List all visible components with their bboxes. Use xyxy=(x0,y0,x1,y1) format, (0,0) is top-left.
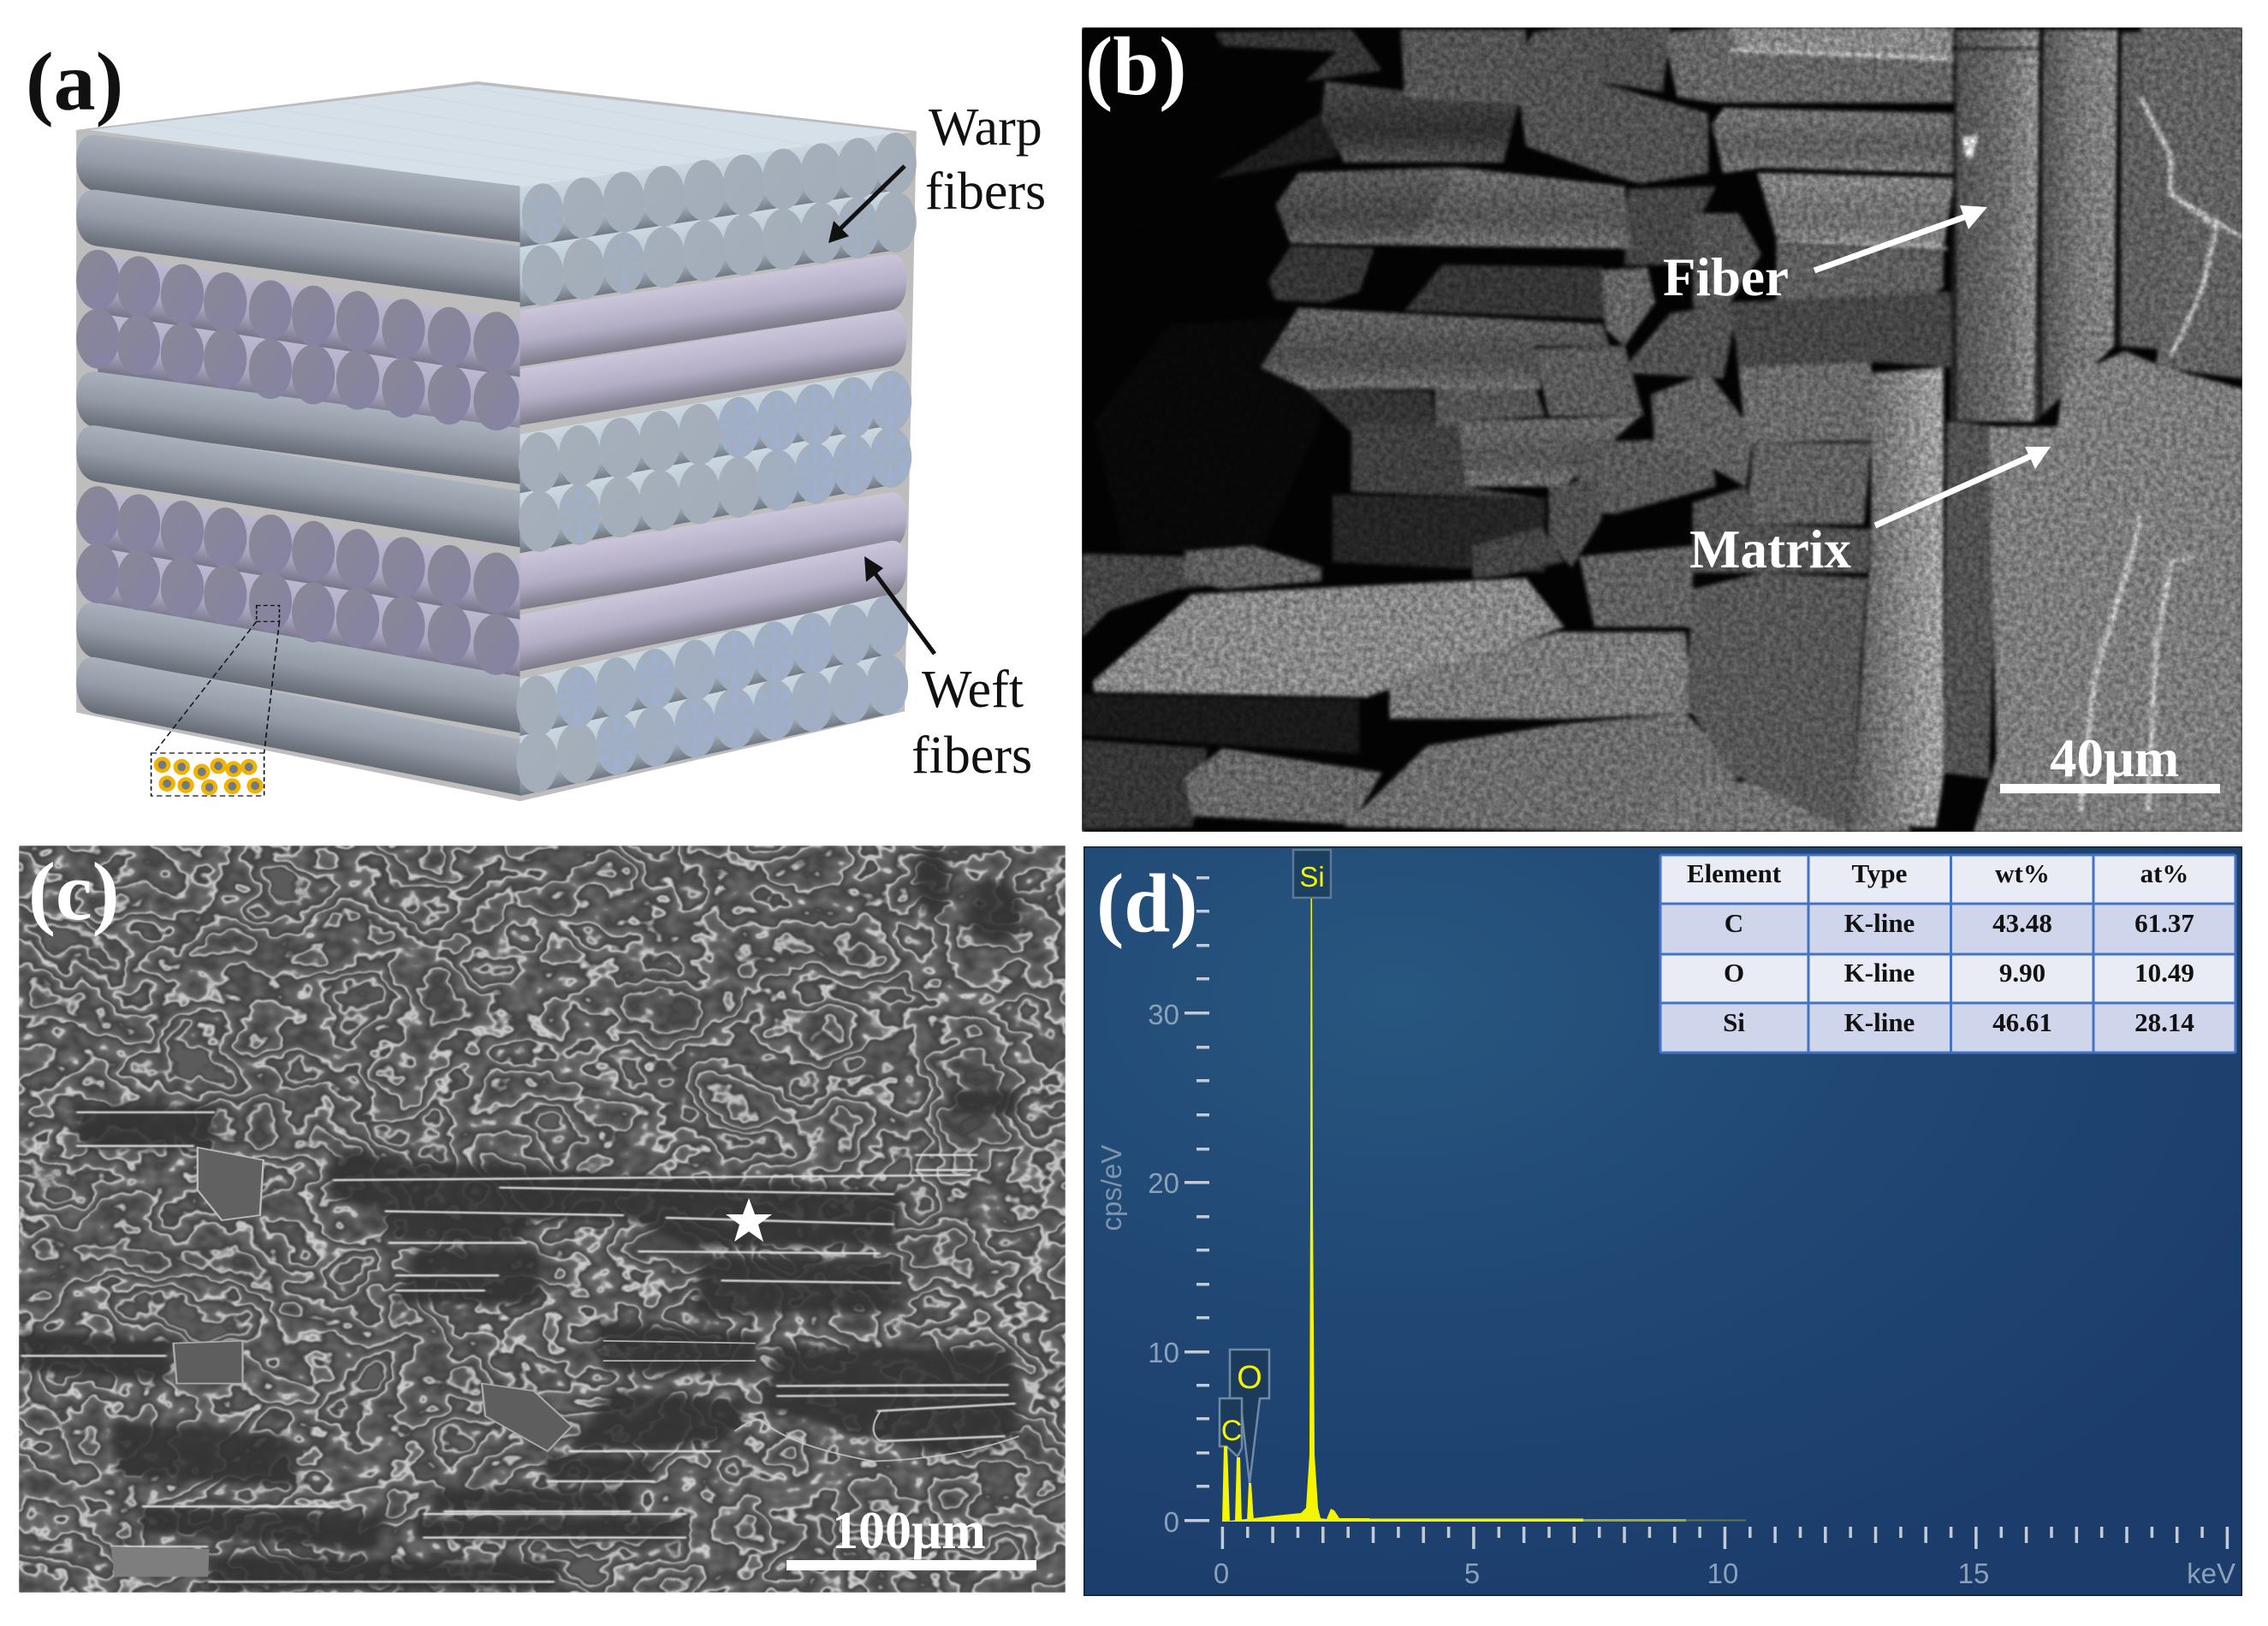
x axis ticks xyxy=(1222,1527,2227,1549)
fiber block 3D model xyxy=(76,81,917,801)
x axis values: 15 xyxy=(1958,1558,1989,1589)
label (b): (b) xyxy=(1085,21,1187,112)
row: O: O xyxy=(1724,958,1744,988)
icon: star marker xyxy=(726,1198,772,1242)
label: fiber: Fiber xyxy=(1663,247,1789,307)
table header: Element xyxy=(1687,858,1782,888)
y axis title: cps/eV xyxy=(1095,1145,1127,1231)
label: warp fibers: fibers xyxy=(925,163,1046,221)
y axis values: 10 xyxy=(1148,1337,1179,1368)
row: C: 43.48 xyxy=(1992,908,2052,938)
arrow: weft fibers xyxy=(864,556,935,654)
row: C: 61.37 xyxy=(2134,908,2194,938)
element marker: Si: Si xyxy=(1299,861,1325,893)
arrow: warp fibers xyxy=(828,166,905,243)
spectrum trace with C, O and Si peaks xyxy=(1222,899,1746,1522)
row: C: C xyxy=(1725,908,1743,938)
x axis values: keV xyxy=(2187,1558,2235,1589)
scale bar: 40 micrometres xyxy=(2000,739,2220,793)
table header: wt% xyxy=(1995,858,2050,888)
label: weft fibers: Weft xyxy=(922,661,1024,719)
grooves left by pulled-out fibers xyxy=(21,846,1023,1589)
row: Si: 28.14 xyxy=(2134,1007,2194,1037)
scale bar: 100 micrometres: 100μm xyxy=(832,1502,986,1560)
SEM micrograph: rough fracture texture xyxy=(19,846,1066,1593)
arrow: matrix xyxy=(1875,447,2051,525)
y axis ticks xyxy=(1184,876,1209,1522)
x axis values xyxy=(1214,1558,2235,1589)
scale bar: 40 micrometres: 40μm xyxy=(2050,728,2179,788)
element marker: C xyxy=(1220,1398,1242,1457)
label (d): (d) xyxy=(1096,858,1198,949)
scale bar: 100 micrometres xyxy=(787,1512,1036,1570)
row: C: K-line xyxy=(1844,908,1915,938)
label (a): (a) xyxy=(26,36,123,128)
panel (a): woven fiber block schematic xyxy=(26,36,1046,801)
panel (b): SEM image of fiber pull-out xyxy=(1082,21,2243,832)
panel (d): EDS spectrum xyxy=(1084,846,2242,1596)
y axis values: 0 xyxy=(1164,1506,1179,1538)
table header: at% xyxy=(2140,858,2188,888)
element marker: O: O xyxy=(1237,1360,1262,1396)
element marker: C: C xyxy=(1221,1415,1242,1447)
x axis values: 5 xyxy=(1464,1558,1480,1589)
row: Si: 46.61 xyxy=(1992,1007,2052,1037)
label: matrix: Matrix xyxy=(1689,519,1851,579)
inset: zoom box and fiber cross-section detail xyxy=(151,606,279,796)
arrow: fiber xyxy=(1814,205,1987,270)
table: element composition xyxy=(1660,855,2235,1053)
x axis values: 10 xyxy=(1707,1558,1738,1589)
row: C xyxy=(1725,908,2194,938)
panel (c): SEM image of fracture surface xyxy=(19,846,1066,1593)
row: O: 10.49 xyxy=(2134,958,2194,988)
row: Si: K-line xyxy=(1844,1007,1915,1037)
label: weft fibers: fibers xyxy=(911,727,1032,785)
label: warp fibers: Warp xyxy=(929,98,1042,157)
spectrum background xyxy=(1084,846,2242,1596)
table header xyxy=(1687,858,2188,888)
element marker: O xyxy=(1230,1350,1269,1483)
label (c): (c) xyxy=(28,846,120,937)
row: Si xyxy=(1723,1007,2194,1037)
row: O xyxy=(1724,958,2194,988)
x axis values: 0 xyxy=(1214,1558,1229,1589)
y axis values xyxy=(1148,999,1179,1538)
y axis values: 20 xyxy=(1148,1167,1179,1199)
table header: Type xyxy=(1852,858,1907,888)
row: Si: Si xyxy=(1723,1007,1745,1037)
element marker: Si xyxy=(1293,850,1331,898)
y axis values: 30 xyxy=(1148,999,1179,1030)
row: O: 9.90 xyxy=(1999,958,2045,988)
row: O: K-line xyxy=(1844,958,1915,988)
SEM micrograph: fractured fibers and matrix xyxy=(1082,27,2243,832)
